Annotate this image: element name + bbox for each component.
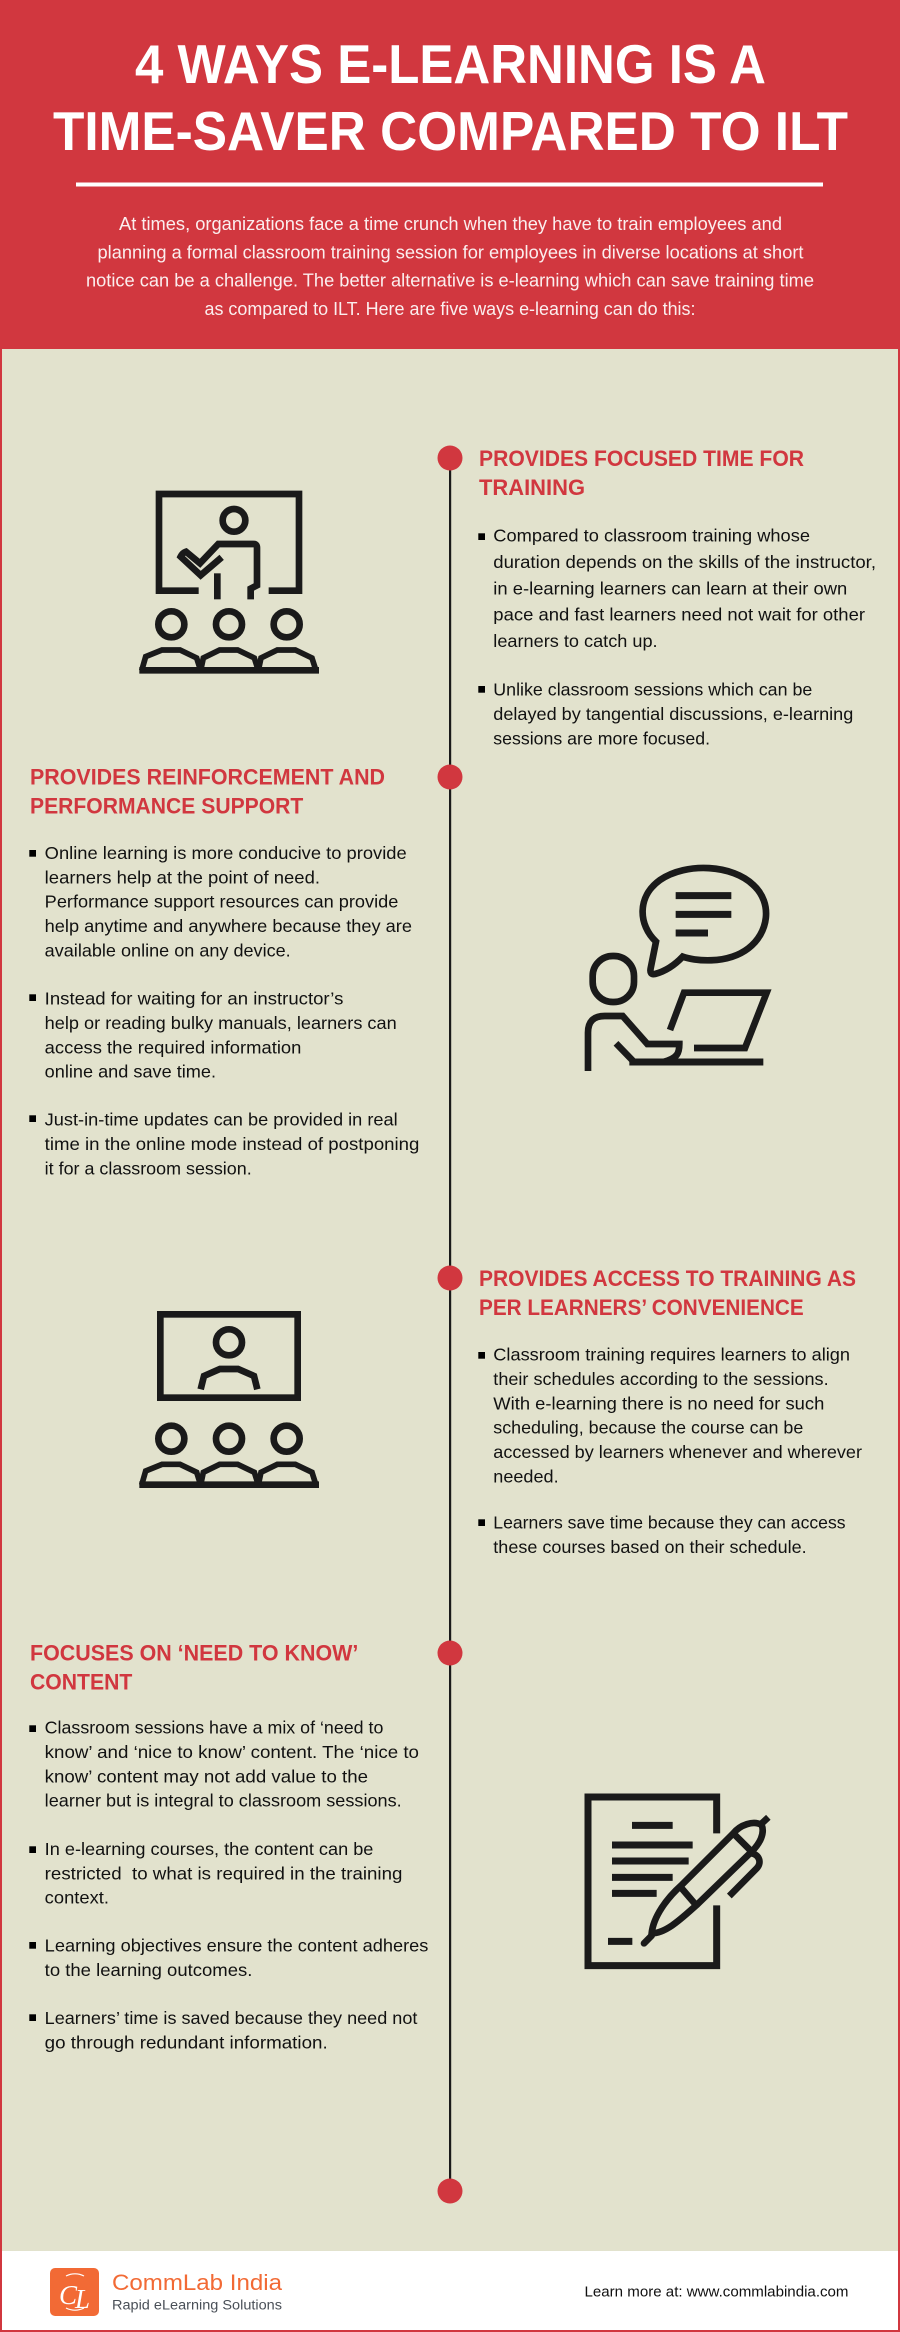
bullet 2: these courses based on their schedule. [493, 1537, 807, 1557]
bullet 1: their schedules according to the sessions. [493, 1369, 829, 1389]
heading: PER LEARNERS’ CONVENIENCE [479, 1295, 804, 1320]
logo [50, 2268, 283, 2316]
timeline end node [438, 2178, 462, 2204]
bullet 1: know’ and ‘nice to know’ content. The ‘nice to [45, 1742, 419, 1762]
bullet 1: Online learning is more conducive to provide [45, 843, 407, 863]
bullet 3: to the learning outcomes. [45, 1960, 252, 1980]
panel: access to training [478, 1266, 862, 1557]
bullet 2: In e-learning courses, the content can be [45, 1839, 373, 1859]
bullet 1: know’ content may not add value to the [45, 1766, 368, 1786]
timeline node 3 [438, 1266, 462, 1290]
bullet 1: Classroom training requires learners to align [493, 1345, 850, 1365]
bullet 1: duration depends on the skills of the instructor, [493, 552, 876, 572]
timeline node 1 [438, 446, 462, 470]
bullet 1 [478, 1345, 862, 1486]
bullet 1: learners help at the point of need. [45, 867, 320, 887]
logo mark: L [74, 2284, 90, 2314]
bullet 2: online and save time. [45, 1062, 216, 1082]
logo tagline: Rapid eLearning Solutions [112, 2297, 282, 2312]
icon: video presenter with audience [139, 1314, 319, 1485]
footer background [2, 2251, 898, 2330]
icon: instructor at board with audience [139, 494, 319, 671]
bullet 1: scheduling, because the course can be [493, 1418, 803, 1438]
bullet 3 [29, 1109, 419, 1178]
bullet 1: in e-learning learners can learn at their own [493, 578, 847, 598]
logo mark: C [59, 2280, 78, 2310]
bullet 2 [29, 1839, 402, 1907]
bullet 2: restricted to what is required in the training [45, 1863, 402, 1883]
bullet 1 [29, 843, 412, 960]
heading [479, 446, 804, 500]
bullet 1: accessed by learners whenever and wherever [493, 1442, 862, 1462]
footer [50, 2268, 848, 2316]
bullet 2 [478, 680, 853, 748]
bullet 2 [478, 1513, 846, 1557]
bullet 3: Just-in-time updates can be provided in real [45, 1109, 398, 1129]
learn more link text: Learn more at: www.commlabindia.com [584, 2284, 848, 2301]
bullet 2: Unlike classroom sessions which can be [493, 680, 812, 700]
heading: CONTENT [30, 1669, 133, 1694]
bullet 4: go through redundant information. [45, 2032, 328, 2052]
bullet 1: learners to catch up. [493, 631, 658, 651]
title [53, 33, 848, 162]
heading: PROVIDES REINFORCEMENT AND [30, 765, 385, 790]
bullet 2: Instead for waiting for an instructor’s [45, 988, 344, 1008]
heading: PERFORMANCE SUPPORT [30, 793, 304, 818]
bullet 1: pace and fast learners need not wait for other [493, 605, 865, 625]
icon: document and pen [588, 1797, 768, 1966]
bullet 1: With e-learning there is no need for such [493, 1393, 824, 1413]
bullet 3: time in the online mode instead of postponing [45, 1134, 419, 1154]
bullet 2: Learners save time because they can access [493, 1513, 846, 1533]
bullet 3 [29, 1936, 429, 1980]
panel: need to know content [29, 1641, 429, 2052]
panel: focused time [478, 446, 876, 748]
bullet 2: delayed by tangential discussions, e-learning [493, 704, 853, 724]
heading: PROVIDES ACCESS TO TRAINING AS [479, 1266, 856, 1291]
heading: TRAINING [479, 475, 585, 500]
timeline node 4 [438, 1640, 462, 1666]
logo name: CommLab India [112, 2270, 283, 2295]
bullet 1 [29, 1718, 419, 1811]
heading [30, 1641, 358, 1694]
timeline node 2 [438, 764, 462, 790]
heading: FOCUSES ON ‘NEED TO KNOW’ [30, 1641, 358, 1666]
intro text: planning a formal classroom training session for employees in diverse locations at short [98, 242, 803, 262]
bullet 4 [29, 2008, 418, 2052]
bullet 1 [478, 526, 876, 651]
bullet 1: available online on any device. [45, 940, 291, 960]
bullet 2: access the required information [45, 1037, 301, 1057]
title: TIME-SAVER COMPARED TO ILT [53, 100, 848, 162]
bullet 2 [29, 988, 397, 1082]
bullet 1: needed. [493, 1466, 559, 1486]
header [53, 33, 848, 319]
bullet 1: Compared to classroom training whose [493, 526, 810, 546]
panel: reinforcement and performance support [29, 765, 419, 1178]
bullet 4: Learners’ time is saved because they need not [45, 2008, 418, 2028]
bullet 3: it for a classroom session. [45, 1158, 252, 1178]
intro text: notice can be a challenge. The better alternative is e-learning which can save training time [86, 271, 814, 291]
bullet 3: Learning objectives ensure the content adheres [45, 1936, 429, 1956]
bullet 1: Performance support resources can provide [45, 892, 398, 912]
bullet 1: learner but is integral to classroom sessions. [45, 1791, 402, 1811]
heading: PROVIDES FOCUSED TIME FOR [479, 446, 804, 471]
title underline [76, 182, 823, 186]
intro text: At times, organizations face a time crunch when they have to train employees and [119, 214, 782, 234]
logo mark [50, 2268, 99, 2316]
bullet 2: sessions are more focused. [493, 728, 710, 748]
heading [479, 1266, 856, 1320]
bullet 2: context. [45, 1887, 109, 1907]
bullet 1: Classroom sessions have a mix of ‘need to [45, 1718, 383, 1738]
timeline [438, 446, 462, 2204]
intro text [86, 214, 814, 319]
intro text: as compared to ILT. Here are five ways e-learning can do this: [204, 299, 696, 319]
heading [30, 765, 385, 818]
title: 4 WAYS E-LEARNING IS A [135, 33, 766, 95]
icon: person at laptop with speech bubble [588, 868, 767, 1071]
bullet 1: help anytime and anywhere because they are [45, 916, 412, 936]
bullet 2: help or reading bulky manuals, learners can [45, 1013, 397, 1033]
